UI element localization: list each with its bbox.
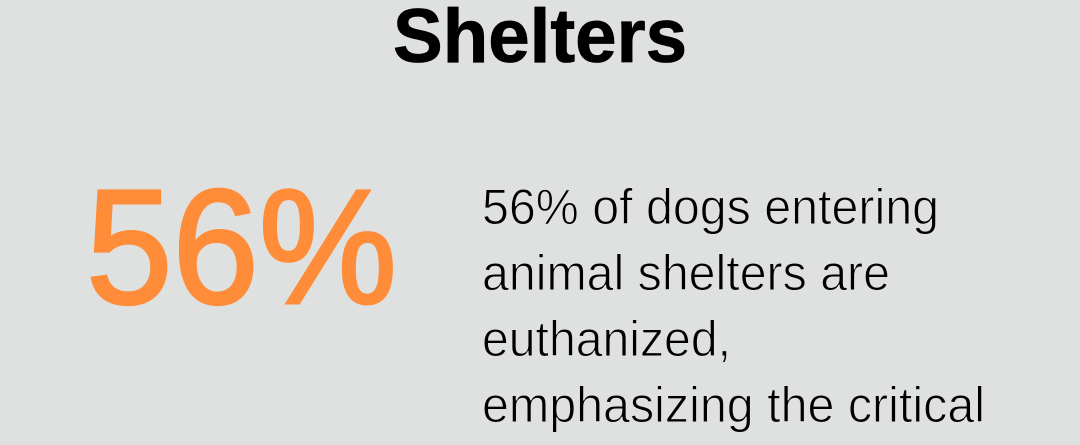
big statistic: 56%: 56% bbox=[86, 155, 397, 338]
description text block bbox=[482, 179, 985, 433]
description text block: animal shelters are bbox=[482, 245, 890, 301]
description text block: 56% of dogs entering bbox=[482, 179, 939, 235]
description text block: emphasizing the critical bbox=[482, 377, 985, 433]
description text block: euthanized, bbox=[482, 311, 731, 367]
